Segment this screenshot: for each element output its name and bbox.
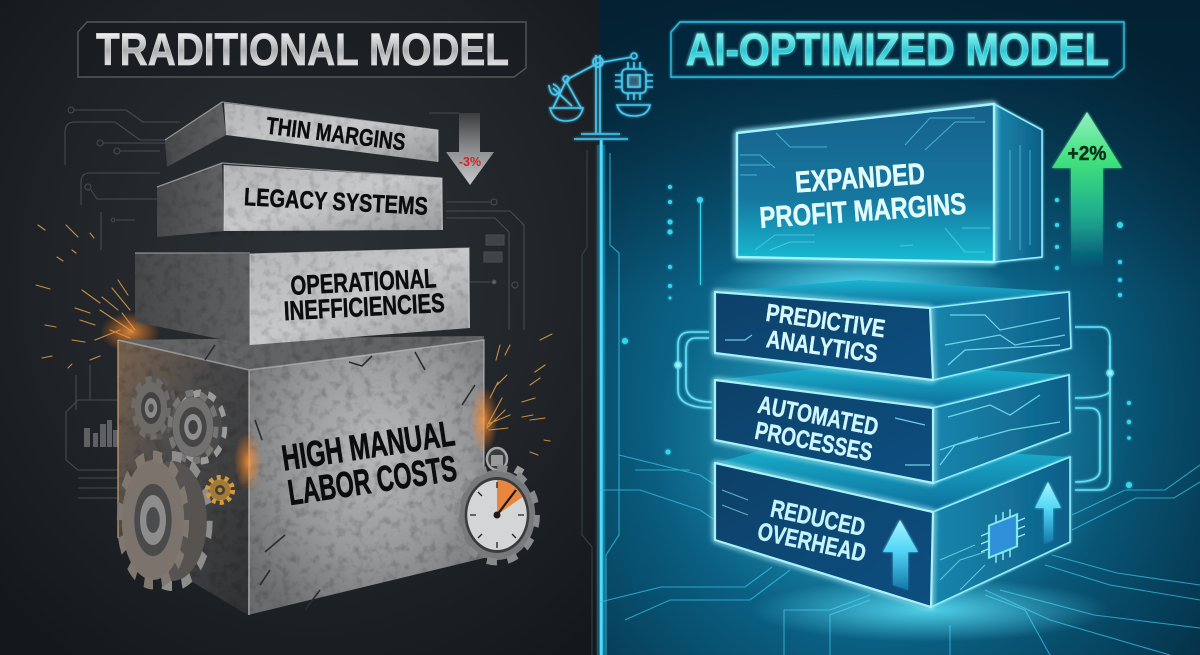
data dots: right <box>622 185 1132 488</box>
connector traces between layers <box>675 327 1113 490</box>
text: high manual labor costs <box>279 412 462 513</box>
block: legacy systems <box>157 163 443 237</box>
text: high manual labor costs: HIGH MANUAL <box>279 412 457 479</box>
text: predictive analytics <box>761 299 887 369</box>
circuit detail <box>725 315 1065 365</box>
panel: ai-optimized model background <box>600 0 1200 655</box>
block: operational inefficiencies <box>135 248 470 345</box>
arrow: down minus 3 percent <box>446 113 494 185</box>
icon: stopwatch <box>457 448 537 562</box>
right circuit traces <box>600 455 1200 655</box>
gear: small glowing <box>208 478 232 502</box>
text: expanded profit margins: EXPANDED <box>794 157 926 199</box>
arrow: side face <box>1035 482 1061 544</box>
circuit detail <box>895 395 1060 465</box>
text: operational inefficiencies: OPERATIONAL <box>290 263 437 301</box>
glow: orange crack center <box>234 432 262 492</box>
text: expanded profit margins <box>756 155 967 235</box>
panel: traditional model background <box>0 0 600 655</box>
sparks: right <box>487 334 552 455</box>
text: operational inefficiencies <box>282 263 445 326</box>
text: automated processes: PROCESSES <box>753 417 875 467</box>
circuit detail <box>740 118 1030 252</box>
text: predictive analytics: ANALYTICS <box>765 325 879 369</box>
icon: chip in right pan <box>622 69 646 93</box>
text: reduced overhead <box>755 493 874 568</box>
title: ai-optimized model: AI-OPTIMIZED MODEL <box>686 24 1109 75</box>
sparks: left <box>36 225 135 368</box>
block: thin margins <box>165 102 438 167</box>
glow: orange left crack <box>100 312 160 352</box>
gear: large <box>120 456 210 586</box>
text: predictive analytics: PREDICTIVE <box>764 299 887 343</box>
arrow: front face <box>883 520 918 590</box>
icon: chip <box>981 503 1025 569</box>
text: expanded profit margins: PROFIT MARGINS <box>758 188 967 235</box>
left circuit traces <box>65 107 524 498</box>
gear: upper small <box>133 379 175 437</box>
text: automated processes <box>751 391 881 467</box>
label: plus 2 percent: +2% <box>1068 143 1107 165</box>
block: predictive analytics <box>715 280 1071 380</box>
text: automated processes: AUTOMATED <box>756 391 881 442</box>
block: high manual labor costs <box>118 336 484 615</box>
icon: balance scale <box>549 53 653 139</box>
text: legacy systems: LEGACY SYSTEMS <box>243 183 429 221</box>
divider line: center <box>582 140 619 655</box>
block: reduced overhead <box>715 440 1070 607</box>
glow: center behind stack <box>650 250 1130 642</box>
text: operational inefficiencies: INEFFICIENCIES <box>283 288 445 326</box>
text: reduced overhead: REDUCED <box>768 495 868 542</box>
circuit detail <box>722 490 985 590</box>
label: minus 3 percent: -3% <box>459 155 481 169</box>
small bar chart icon <box>84 420 118 447</box>
gear: upper medium <box>170 393 225 461</box>
title: traditional model: TRADITIONAL MODEL <box>96 24 509 75</box>
icon: wrench in left pan <box>549 84 572 106</box>
arrow: up plus 2 percent <box>1052 112 1122 268</box>
block: automated processes <box>715 363 1070 483</box>
text: thin margins: THIN MARGINS <box>265 113 407 156</box>
text: reduced overhead: OVERHEAD <box>755 518 868 568</box>
glow: orange crack right <box>470 386 498 454</box>
text: high manual labor costs: LABOR COSTS <box>285 447 459 513</box>
block: expanded profit margins <box>737 104 1042 262</box>
